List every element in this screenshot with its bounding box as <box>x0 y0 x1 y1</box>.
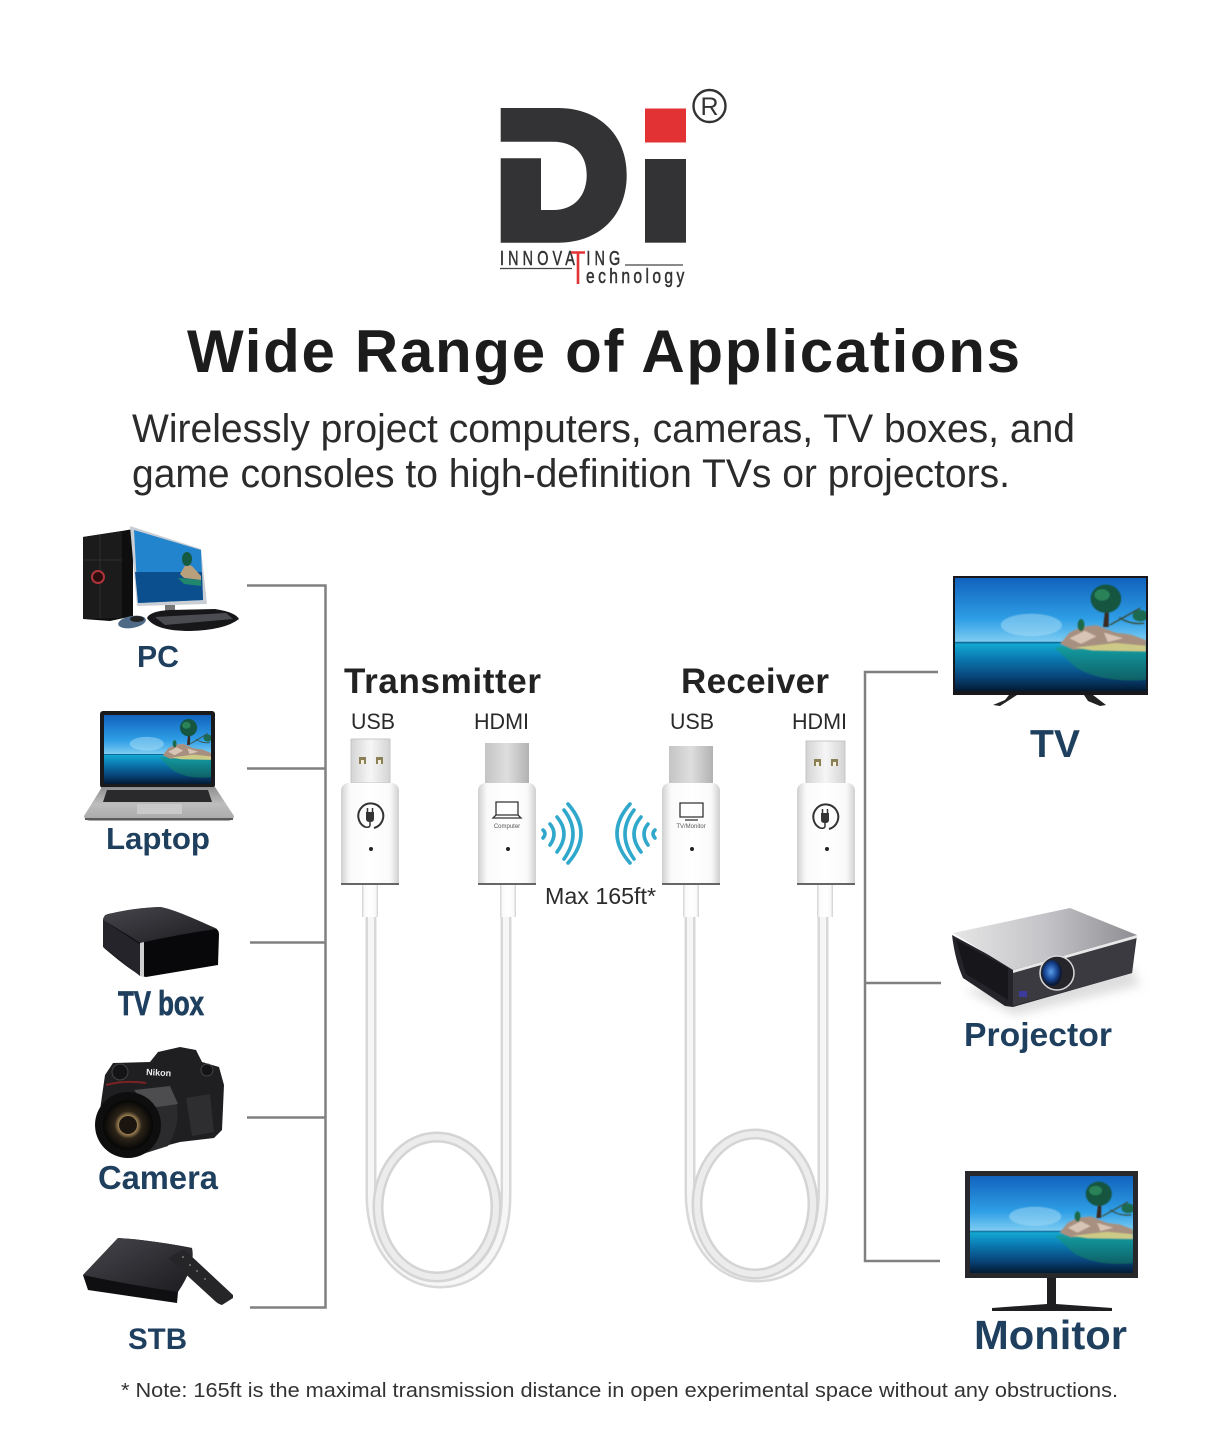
icon: PC <box>83 526 239 631</box>
subtitle: Wirelessly project computers, cameras, TV boxes, and <box>132 407 1075 451</box>
icon: monitor <box>965 1171 1138 1311</box>
icon: camera <box>95 1047 224 1158</box>
icon: TV box <box>103 907 219 977</box>
port labels: USB <box>351 709 395 734</box>
title: Wide Range of Applications <box>187 318 1020 385</box>
icon: wireless waves incoming <box>617 804 655 863</box>
port labels: HDMI <box>792 709 847 734</box>
subtitle <box>132 407 1075 496</box>
dongle: receiver HDMI <box>797 741 855 917</box>
dongle: transmitter HDMI <box>478 743 536 917</box>
logo tagline: echnology: echnology <box>586 265 684 287</box>
icon: projector <box>952 908 1140 1015</box>
icon: TV <box>953 576 1148 706</box>
dongle: transmitter HDMI: Computer <box>494 824 520 830</box>
icon: camera: Nikon <box>146 1067 171 1078</box>
logo mark: letter i stem <box>645 159 686 243</box>
logo mark: red square <box>645 108 686 142</box>
label: camera: Camera <box>98 1159 219 1196</box>
logo mark: letter D <box>501 108 627 243</box>
port labels: HDMI <box>474 709 529 734</box>
registered trademark symbol <box>694 90 726 122</box>
registered trademark symbol: R <box>700 93 719 121</box>
icon: laptop <box>84 711 234 821</box>
label: TV: TV <box>1030 723 1080 766</box>
port labels: USB <box>670 709 714 734</box>
heading: Receiver: Receiver <box>681 662 829 701</box>
connector lines: source devices <box>247 586 326 1308</box>
label: STB: STB <box>128 1323 187 1356</box>
dongle: receiver USB: TV/Monitor <box>676 824 706 830</box>
cable: transmitter <box>371 915 506 1283</box>
footnote: * Note: 165ft is the maximal transmission distance in open experimental space without any obstructions. <box>121 1379 1118 1402</box>
icon: STB <box>83 1238 233 1305</box>
logo: Di Innovating Technology <box>500 90 726 287</box>
icon: wireless waves outgoing <box>543 804 581 863</box>
label: PC: PC <box>137 639 179 674</box>
heading: Transmitter: Transmitter <box>344 662 541 701</box>
range label: Max 165ft* <box>545 883 656 909</box>
label: projector: Projector <box>964 1017 1112 1054</box>
cable: receiver <box>690 915 823 1277</box>
subtitle: game consoles to high-definition TVs or projectors. <box>132 452 1010 496</box>
label: Laptop: Laptop <box>106 821 210 856</box>
dongle: transmitter USB <box>341 739 399 917</box>
red T stroke <box>571 252 585 284</box>
port labels <box>351 709 847 734</box>
logo tagline: Innovating: INNOVA ING <box>500 247 620 270</box>
dongle: receiver USB <box>662 746 720 917</box>
label: monitor: Monitor <box>974 1312 1127 1358</box>
connector lines: display devices <box>865 672 941 1261</box>
label: TV box: TV box <box>118 985 204 1023</box>
